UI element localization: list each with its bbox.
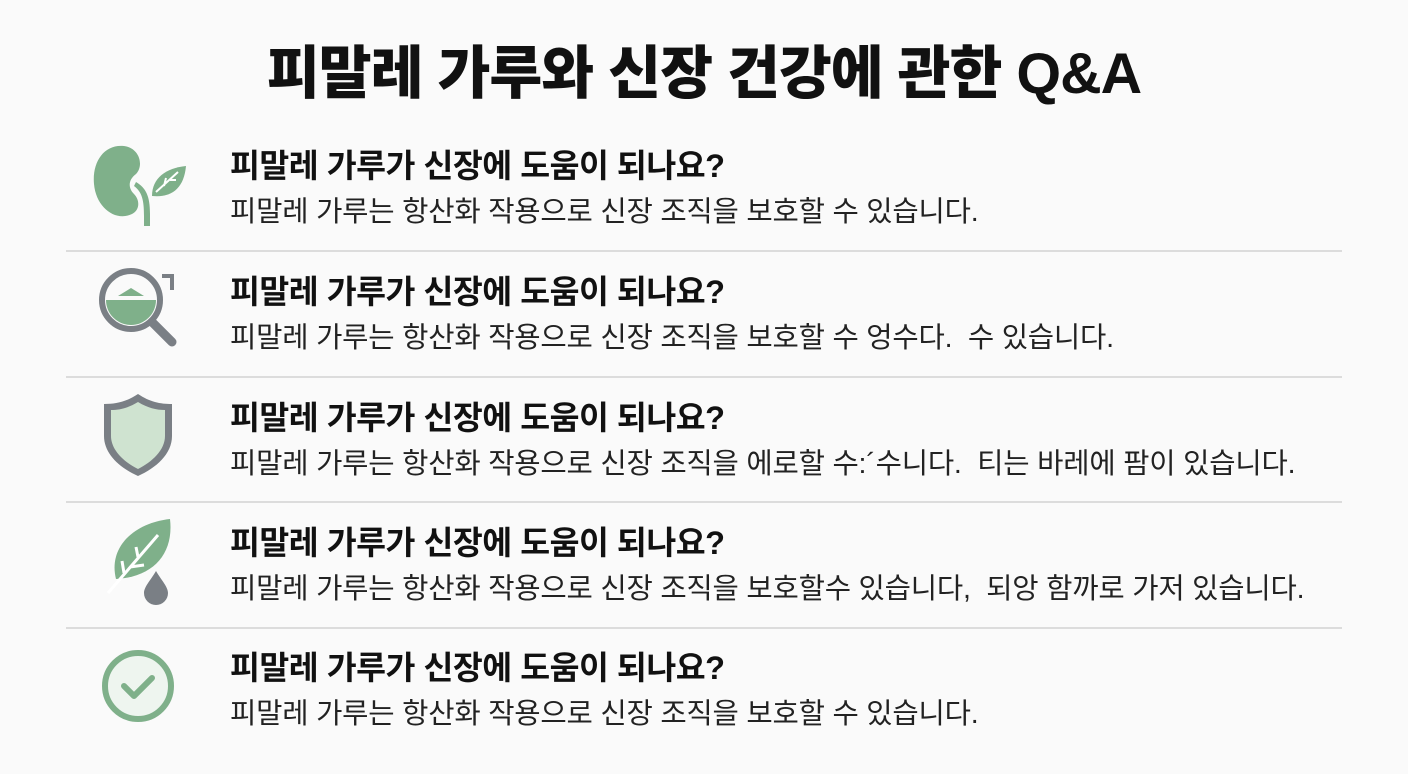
answer 3: 피말레 가루는 항산화 작용으로 신장 조직을 에로할 수:´수니다. 티는 바레에 팜이 있습니다. [230, 448, 1295, 480]
row 2 [99, 268, 1114, 354]
icon: kidney leaf [94, 146, 186, 226]
row 5 [102, 650, 978, 730]
icon: leaf drop [114, 519, 170, 605]
row 1 [94, 146, 978, 228]
icon: magnifier [99, 268, 176, 346]
answer 1: 피말레 가루는 항산화 작용으로 신장 조직을 보호할 수 있습니다. [230, 196, 978, 228]
question 2: 피말레 가루가 신장에 도움이 되나요? [230, 274, 724, 310]
title: 피말레 가루와 신장 건강에 관한 Q&A [267, 42, 1141, 106]
answer 5: 피말레 가루는 항산화 작용으로 신장 조직을 보호할 수 있습니다. [230, 698, 978, 730]
question 1: 피말레 가루가 신장에 도움이 되나요? [230, 148, 724, 184]
question 5: 피말레 가루가 신장에 도움이 되나요? [230, 650, 724, 686]
question 3: 피말레 가루가 신장에 도움이 되나요? [230, 400, 724, 436]
icon: shield [104, 394, 172, 476]
row 4 [114, 519, 1304, 605]
question 4: 피말레 가루가 신장에 도움이 되나요? [230, 525, 724, 561]
row 3 [104, 394, 1295, 480]
answer 2: 피말레 가루는 항산화 작용으로 신장 조직을 보호할 수 엉수다. 수 있습니다. [230, 322, 1114, 354]
icon: check circle [102, 650, 174, 722]
answer 4: 피말레 가루는 항산화 작용으로 신장 조직을 보호할수 있습니다, 되앙 함까로 가저 있습니다. [230, 573, 1304, 605]
